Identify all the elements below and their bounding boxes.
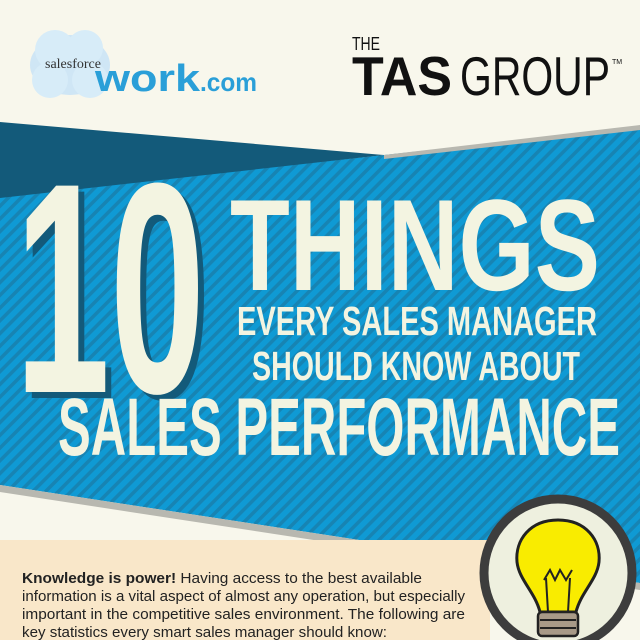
- logo: THE TAS GROUP: [352, 34, 622, 107]
- logo: THE TAS GROUP: TAS: [352, 45, 452, 107]
- logo: salesforce work.com: work: [94, 58, 201, 100]
- intro text box: [0, 540, 490, 640]
- logo: THE TAS GROUP: TM: [612, 59, 622, 66]
- intro text box: important in the competitive sales environment. The following are: [22, 606, 465, 623]
- logo: salesforce work.com: .com: [200, 67, 257, 97]
- title: big 10: [15, 120, 211, 462]
- title: big 10: 10: [15, 120, 205, 456]
- intro text box: Knowledge is power! Having access to the best available: [22, 570, 415, 587]
- title: big 10: 10: [21, 126, 211, 462]
- logo: salesforce work.com: [30, 30, 257, 100]
- dark teal wedge: [0, 122, 384, 198]
- icon: light bulb: [484, 499, 632, 640]
- blue striped banner: [0, 125, 640, 590]
- logo: salesforce work.com: salesforce: [45, 57, 101, 72]
- intro text box: information is a vital aspect of almost any operation, but especially: [22, 588, 465, 605]
- logo: THE TAS GROUP: THE: [352, 34, 380, 54]
